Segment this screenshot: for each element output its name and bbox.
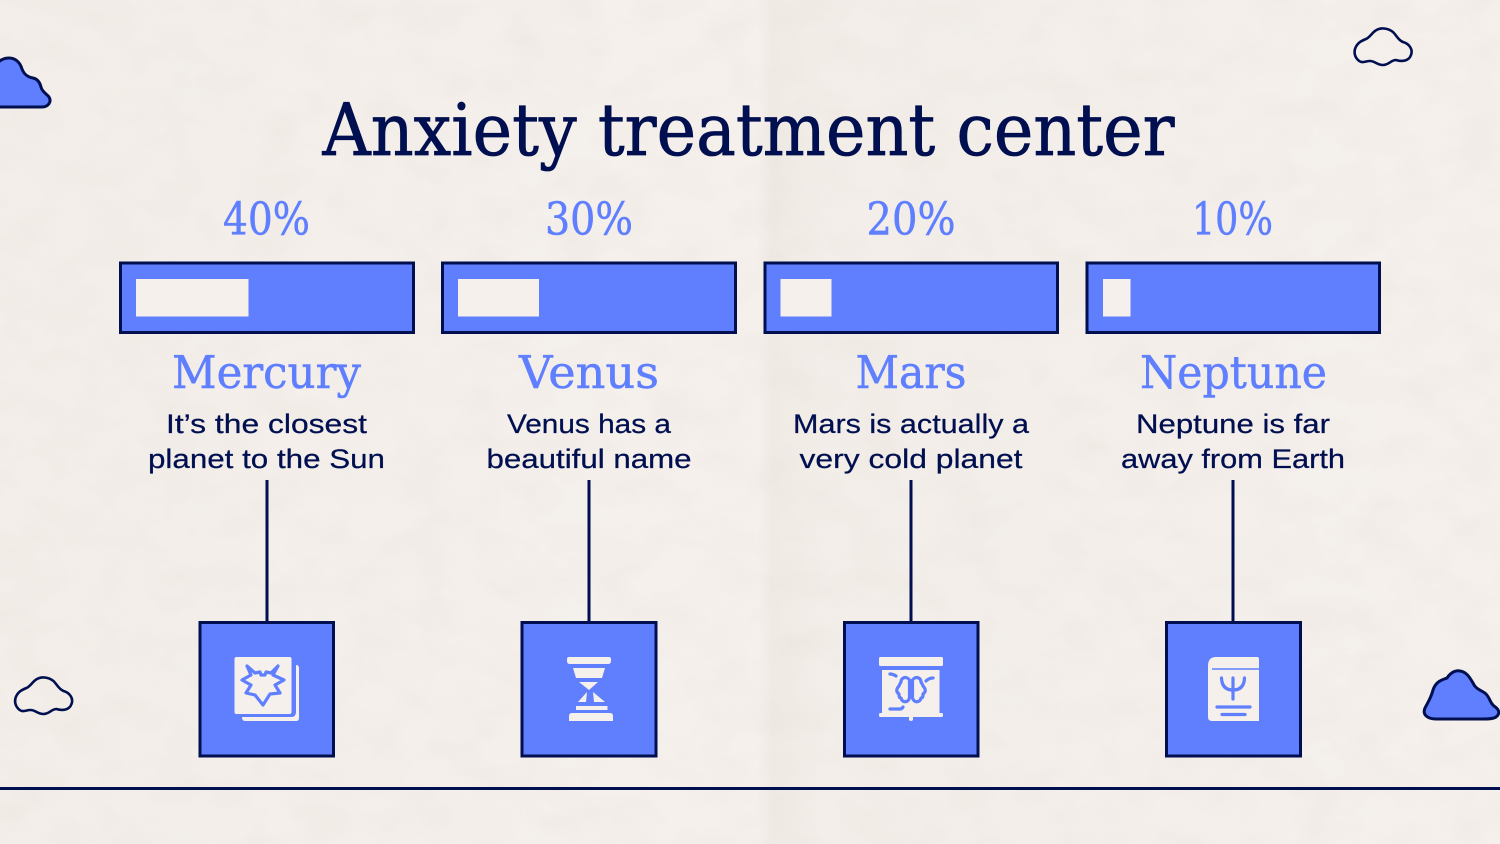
cloud: top left blue	[0, 58, 50, 107]
icon box: inkblot test	[200, 622, 334, 756]
column: Mercury	[120, 192, 414, 756]
description: Mars	[793, 409, 1030, 474]
heading: Mars: Mars	[856, 346, 966, 399]
progress bar: 20%	[765, 263, 1058, 332]
progress bar: 30%	[442, 263, 736, 332]
description: Mars: very cold planet	[800, 444, 1023, 474]
description: Venus	[486, 409, 692, 474]
description: Mercury: planet to the Sun	[148, 444, 385, 474]
percentage: 10%: 10%	[1192, 192, 1273, 246]
description: Mercury: It’s the closest	[166, 409, 368, 439]
connector line	[266, 480, 268, 623]
description: Venus: beautiful name	[486, 444, 692, 474]
connector line	[1232, 480, 1234, 623]
description: Neptune: Neptune is far	[1136, 409, 1330, 439]
percentage: 20%: 20%	[866, 192, 956, 246]
column: Mars	[765, 192, 1058, 756]
description: Neptune	[1121, 409, 1345, 474]
cloud: bottom right blue	[1424, 671, 1499, 719]
cloud: bottom left outline	[15, 677, 72, 714]
connector line	[588, 480, 590, 623]
icon box: hourglass	[522, 622, 656, 756]
description: Mercury	[148, 409, 385, 474]
percentage: 30%: 30%	[545, 192, 633, 246]
connector line	[910, 480, 912, 623]
cloud: top right outline	[1355, 28, 1412, 65]
percentage: 40%: 40%	[223, 192, 310, 246]
description: Neptune: away from Earth	[1121, 444, 1345, 474]
column: Neptune	[1087, 192, 1380, 756]
column: Venus	[442, 192, 736, 756]
heading: Neptune: Neptune	[1140, 346, 1327, 399]
heading: Mercury: Mercury	[172, 346, 362, 399]
heading: Venus: Venus	[518, 346, 659, 399]
progress bar: 10%	[1087, 263, 1380, 332]
baseline rule	[0, 787, 1500, 790]
description: Mars: Mars is actually a	[793, 409, 1030, 439]
progress bar: 40%	[120, 263, 414, 332]
icon box: brain presentation	[844, 622, 978, 756]
icon box: psychology book	[1166, 622, 1300, 756]
description: Venus: Venus has a	[507, 409, 672, 439]
title: Anxiety treatment center	[322, 88, 1175, 172]
